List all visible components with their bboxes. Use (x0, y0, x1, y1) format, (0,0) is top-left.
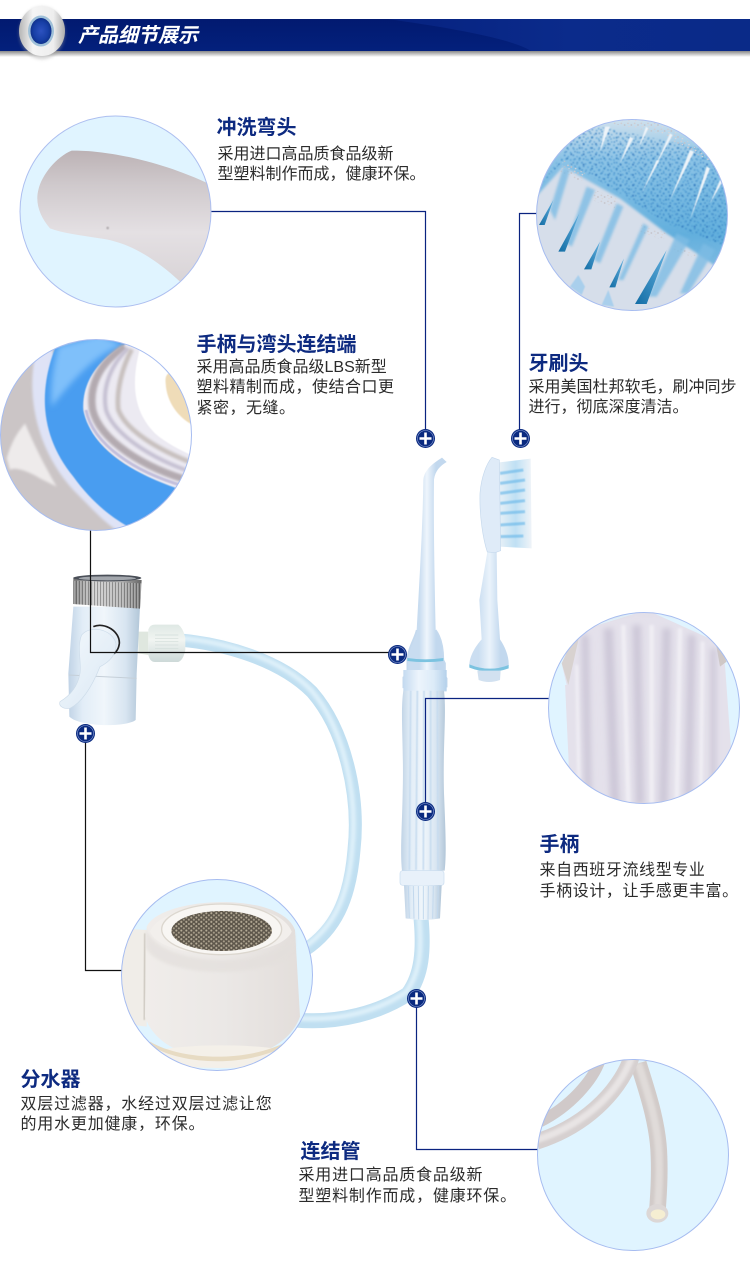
hose: filter to handle (295, 918, 422, 1021)
panel: threaded joint photo (0, 335, 197, 533)
text: handle joint: 塑料精制而成，使结合口更 (196, 378, 395, 396)
text: diverter (20, 1068, 273, 1133)
connector lines (86, 212, 549, 1150)
icon: plus marker joint (388, 645, 407, 664)
text: handle: 来自西班牙流线型专业 (540, 861, 706, 879)
hose: diverter to filter (180, 638, 355, 950)
icon: plus marker handle (416, 802, 435, 821)
white lower tufts (537, 166, 714, 310)
speckled bristle tips (546, 126, 727, 244)
product: ribbed handle (400, 670, 447, 920)
text: handle joint: 手柄与湾头连结端 (196, 332, 356, 356)
text: connecting tube: 型塑料制作而成，健康环保。 (298, 1187, 517, 1205)
text: connecting tube (298, 1140, 517, 1205)
icon: plus marker brush (511, 429, 530, 448)
text: brush head (528, 352, 737, 416)
header banner (0, 6, 750, 59)
icon: lens badge (19, 6, 65, 59)
text: nozzle bend: 冲洗弯头 (216, 115, 296, 139)
dark slots (539, 200, 667, 304)
text: connecting tube: 连结管 (300, 1140, 360, 1163)
panel: connecting tube photo (537, 1059, 729, 1251)
text: brush head: 采用美国杜邦软毛，刷冲同步 (528, 378, 737, 396)
brush bristles (499, 459, 532, 548)
product: tap diverter (60, 575, 185, 725)
pipe connector (138, 625, 185, 662)
metal collar (73, 575, 142, 609)
icon: plus marker tube (407, 989, 426, 1008)
blue streaks between tufts (550, 167, 715, 297)
panel: handle ribs photo (545, 610, 745, 810)
text: connecting tube: 采用进口高品质食品级新 (298, 1166, 483, 1184)
text: brush head: 牙刷头 (528, 352, 588, 375)
text: handle joint: 紧密，无缝。 (196, 399, 296, 417)
blue ring (44, 340, 176, 526)
text: brush head: 进行，彻底深度清洁。 (528, 398, 689, 416)
text: nozzle bend: 型塑料制作而成，健康环保。 (218, 165, 426, 183)
text: nozzle bend: 采用进口高品质食品级新 (218, 145, 394, 163)
text: handle: 手柄设计，让手感更丰富。 (540, 882, 739, 900)
text: diverter: 分水器 (20, 1068, 80, 1091)
text: diverter: 双层过滤器，水经过双层过滤让您 (20, 1095, 273, 1113)
thread insert (82, 344, 189, 488)
text: diverter: 的用水更加健康，环保。 (20, 1115, 205, 1133)
text: handle (540, 833, 739, 900)
text: handle joint: 采用高品质食品级LBS新型 (196, 358, 387, 376)
text: nozzle bend (216, 115, 426, 183)
icon: plus marker nozzle (416, 429, 435, 448)
icon: plus marker diverter (76, 724, 95, 743)
panel: filter cap photo (121, 879, 313, 1071)
banner title: 产品细节展示 (78, 24, 200, 47)
product: brush head (469, 457, 532, 682)
panel: nozzle bend photo (15, 110, 217, 310)
text: handle joint (196, 332, 395, 417)
product: water nozzle (403, 458, 447, 687)
panel: bristles photo (536, 119, 728, 311)
text: handle: 手柄 (540, 833, 580, 856)
